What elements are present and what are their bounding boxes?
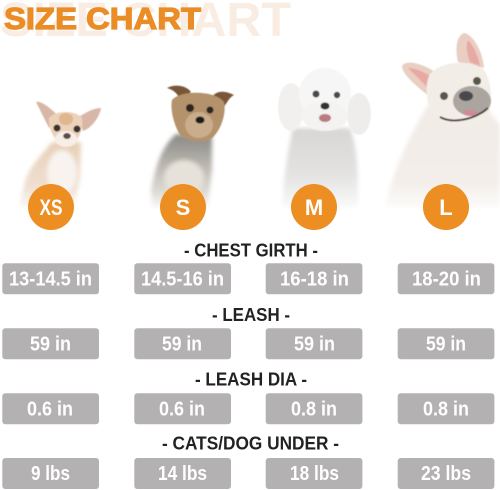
row: chest girth values: 14.5-16 in bbox=[141, 268, 224, 290]
row: chest girth values: 18-20 in bbox=[412, 268, 481, 290]
row: leash dia values: 0.8 in bbox=[291, 398, 337, 420]
badge: M: M bbox=[305, 195, 323, 220]
row: leash dia values: 0.8 in bbox=[423, 398, 469, 420]
row: chest girth values: 16-18 in bbox=[280, 268, 349, 290]
heading: leash dia: - LEASH DIA - bbox=[195, 368, 307, 390]
row: leash dia values: 0.6 in bbox=[159, 398, 205, 420]
photo: poodle bbox=[278, 68, 371, 207]
badge: M bbox=[291, 184, 337, 230]
badge: L bbox=[423, 184, 469, 230]
row: leash dia values bbox=[2, 393, 494, 424]
row: weight values: 14 lbs bbox=[158, 463, 207, 485]
row: weight values: 9 lbs bbox=[31, 463, 70, 485]
title: size chart: SIZE CHART bbox=[4, 2, 201, 36]
row: leash values bbox=[2, 328, 494, 359]
badge: L: L bbox=[439, 195, 453, 220]
photo: french bulldog bbox=[385, 33, 500, 207]
row: leash values: 59 in bbox=[162, 334, 202, 356]
badge: S: S bbox=[176, 195, 190, 220]
badge: XS: XS bbox=[40, 195, 62, 220]
heading: chest girth: - CHEST GIRTH - bbox=[184, 240, 318, 260]
heading: leash: - LEASH - bbox=[212, 304, 290, 325]
row: leash values: 59 in bbox=[30, 334, 71, 356]
row: leash values: 59 in bbox=[294, 334, 335, 356]
row: chest girth values bbox=[2, 263, 494, 294]
row: leash dia values: 0.6 in bbox=[27, 398, 73, 420]
badge: S bbox=[160, 184, 206, 230]
photo: chihuahua bbox=[19, 102, 101, 207]
row: leash values: 59 in bbox=[426, 334, 466, 356]
row: weight values: 18 lbs bbox=[290, 463, 339, 485]
heading: cats/dog under: - CATS/DOG UNDER - bbox=[162, 432, 339, 454]
row: chest girth values: 13-14.5 in bbox=[9, 268, 92, 290]
photo: yorkshire terrier bbox=[151, 86, 234, 207]
row: weight values bbox=[2, 458, 494, 489]
row: weight values: 23 lbs bbox=[421, 463, 471, 485]
badge: XS bbox=[28, 184, 74, 230]
